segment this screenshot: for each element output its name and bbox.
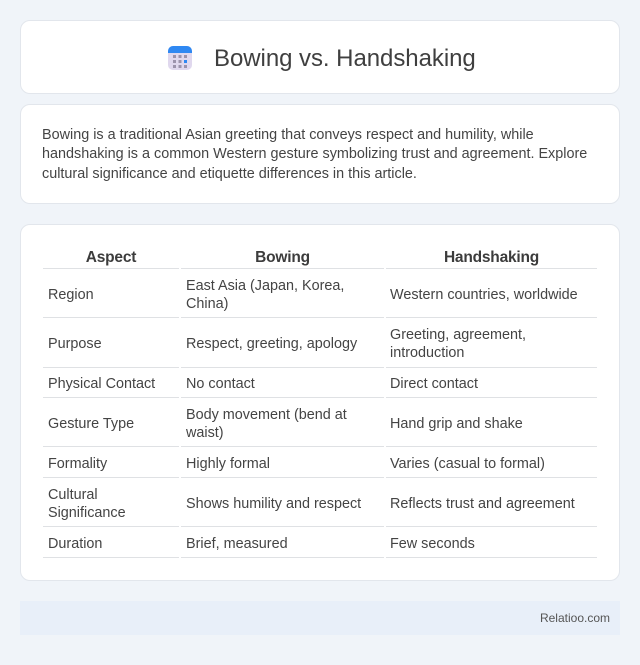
text: Greeting, agreement, [390, 327, 526, 343]
text: introduction [390, 345, 464, 361]
text: East Asia (Japan, Korea, [186, 278, 344, 294]
text: Shows humility and respect [186, 496, 361, 512]
text: Western countries, worldwide [390, 287, 578, 303]
footer bar [20, 601, 620, 635]
text: Hand grip and shake [390, 416, 523, 432]
row: cultural significance [48, 487, 575, 521]
text: Varies (casual to formal) [390, 456, 545, 472]
row: duration [48, 536, 475, 552]
text: Brief, measured [186, 536, 288, 552]
table header: bowing: Bowing [255, 249, 310, 266]
table header: aspect: Aspect [86, 249, 136, 266]
text: Purpose [48, 336, 102, 352]
row: gesture type [48, 407, 523, 441]
text: Cultural [48, 487, 98, 503]
text: Significance [48, 505, 126, 521]
text: Few seconds [390, 536, 475, 552]
text: handshaking is a common Western gesture symbolizing trust and agreement. Explore [42, 146, 587, 162]
row: purpose [48, 327, 526, 361]
row: formality [48, 456, 545, 472]
panel: title card [20, 20, 620, 94]
text: No contact [186, 376, 255, 392]
text: waist) [186, 425, 224, 441]
footer text: Relatioo.com [540, 611, 610, 625]
text: Reflects trust and agreement [390, 496, 575, 512]
intro text [42, 127, 587, 182]
panel: comparison table card [20, 224, 620, 581]
table header: handshaking: Handshaking [444, 249, 539, 266]
row: physical contact [48, 376, 478, 392]
text: Respect, greeting, apology [186, 336, 357, 352]
text: Direct contact [390, 376, 478, 392]
text: Region [48, 287, 94, 303]
text: Body movement (bend at [186, 407, 347, 423]
icon: calendar [168, 46, 192, 70]
text: Physical Contact [48, 376, 155, 392]
text: Highly formal [186, 456, 270, 472]
text: Gesture Type [48, 416, 134, 432]
row: region [48, 278, 578, 312]
text: China) [186, 296, 228, 312]
text: cultural significance and etiquette differences in this article. [42, 166, 417, 182]
text: Formality [48, 456, 107, 472]
text: Duration [48, 536, 102, 552]
title: Bowing vs. Handshaking [214, 45, 476, 72]
text: Bowing is a traditional Asian greeting that conveys respect and humility, while [42, 127, 534, 143]
panel: intro card [20, 104, 620, 204]
